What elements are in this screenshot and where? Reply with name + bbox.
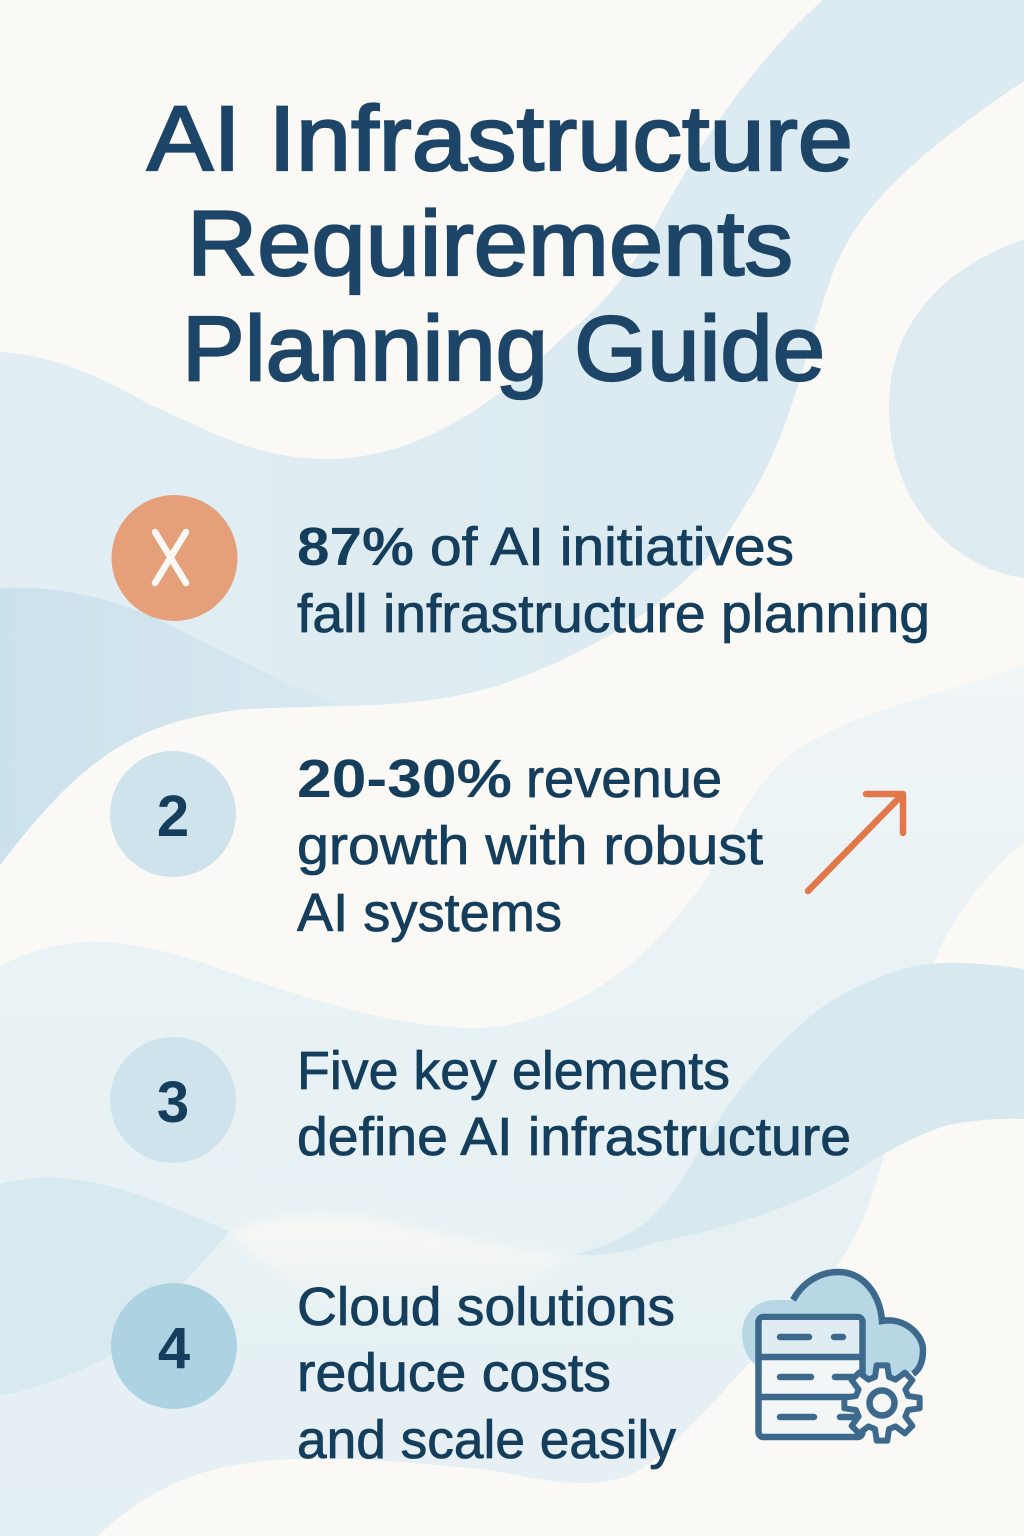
- number badge 2: [110, 751, 236, 877]
- gear: [844, 1365, 920, 1441]
- text: Five key elements define AI infrastructure: Five key elements: [297, 1041, 730, 1101]
- number badge 4: 4: [158, 1316, 190, 1381]
- number badge 3: [110, 1037, 236, 1163]
- number badge 3: 3: [157, 1070, 189, 1135]
- icon: orange circle with X: [112, 495, 238, 621]
- arrow: growth trend: [808, 794, 903, 891]
- text: Cloud solutions reduce costs and scale easily: and scale easily: [297, 1410, 676, 1470]
- item 1: failure statistic: [112, 495, 930, 644]
- text: 87% of AI initiatives fall infrastructure planning: [297, 517, 930, 644]
- title: [147, 88, 853, 400]
- number badge 2: 2: [157, 784, 189, 849]
- text: Cloud solutions reduce costs and scale easily: [297, 1277, 676, 1470]
- text: 20-30% revenue growth with robust AI systems: AI systems: [297, 883, 562, 943]
- text: 20-30% revenue growth with robust AI systems: revenue: [526, 749, 722, 809]
- text: 87% of AI initiatives fall infrastructure planning: of AI initiatives: [430, 517, 794, 577]
- text: 87% of AI initiatives fall infrastructure planning: fall infrastructure planning: [297, 584, 930, 644]
- text: 87% of AI initiatives fall infrastructure planning: 87%: [297, 517, 414, 577]
- text: Five key elements define AI infrastructure: [297, 1041, 851, 1167]
- server rack: [758, 1317, 862, 1437]
- text: 20-30% revenue growth with robust AI systems: [297, 749, 763, 943]
- item 3: key elements: [110, 1037, 851, 1167]
- text: Five key elements define AI infrastructure: define AI infrastructure: [297, 1107, 851, 1167]
- icon: cloud server with gear: [742, 1272, 923, 1441]
- item 2: revenue growth: [110, 749, 903, 943]
- text: 20-30% revenue growth with robust AI systems: 20-30%: [297, 749, 512, 809]
- title: AI Infrastructure: [147, 88, 853, 190]
- item 4: cloud solutions: [111, 1272, 923, 1470]
- title: Planning Guide: [182, 298, 825, 400]
- text: Cloud solutions reduce costs and scale easily: Cloud solutions: [297, 1277, 675, 1337]
- number badge 4: [111, 1283, 237, 1409]
- text: Cloud solutions reduce costs and scale easily: reduce costs: [297, 1343, 611, 1403]
- title: Requirements: [187, 193, 793, 295]
- cloud: [742, 1272, 923, 1400]
- text: 20-30% revenue growth with robust AI systems: growth with robust: [297, 816, 763, 876]
